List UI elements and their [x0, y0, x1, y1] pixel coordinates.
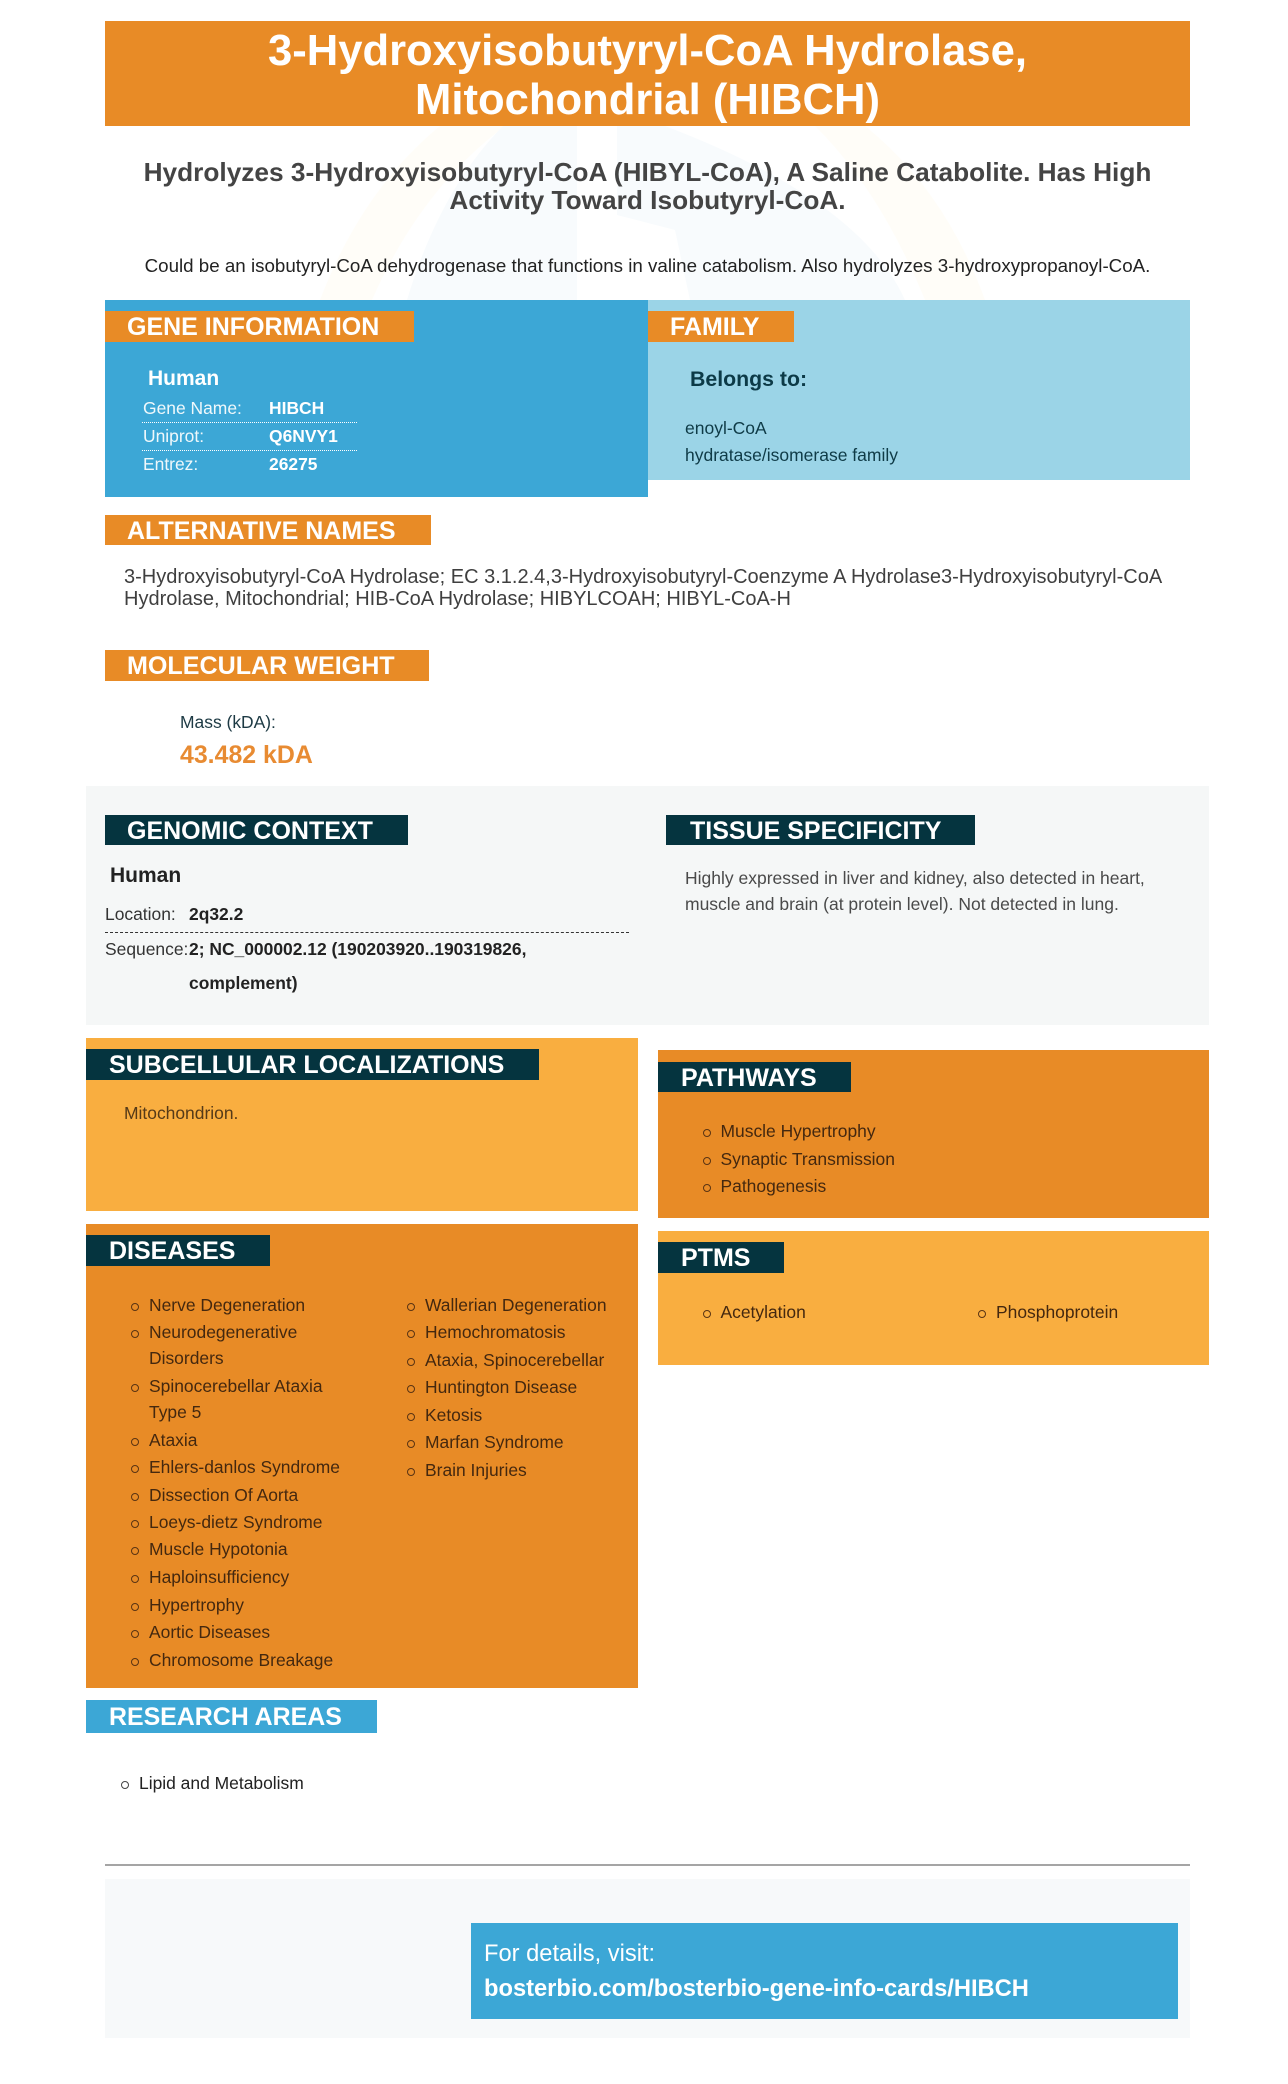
disease list column 1: Disorders [149, 1348, 224, 1368]
heading: family [648, 311, 794, 342]
uniprot row: Uniprot: [143, 426, 204, 446]
mass value: 43.482 kDA [180, 741, 313, 769]
disease list column 1: Chromosome Breakage [149, 1650, 333, 1670]
panel: research areas [86, 1700, 377, 1793]
alternative names text: 3-Hydroxyisobutyryl-CoA Hydrolase; EC 3.1.2.4,3-Hydroxyisobutyryl-Coenzyme A Hydrolase3-Hydroxyisobutyryl-CoA Hydrolase, Mitochondrial; HIB-CoA Hydrolase; HIBYLCOAH; HIBYL-CoA-H [124, 566, 1161, 610]
disease list column 2: Huntington Disease [425, 1377, 577, 1397]
title banner: 3-Hydroxyisobutyryl-CoA Hydrolase, [268, 27, 1027, 75]
disease list column 1: Loeys-dietz Syndrome [149, 1512, 322, 1532]
entrez row: 26275 [269, 454, 318, 474]
footer panel [105, 1879, 1190, 2038]
sequence row [105, 939, 526, 993]
title banner: Mitochondrial (HIBCH) [415, 76, 880, 124]
heading: genomic context: GENOMIC CONTEXT [127, 817, 373, 845]
disease list column 1: Spinocerebellar Ataxia [149, 1376, 323, 1396]
disease list column 1: Dissection Of Aorta [149, 1485, 298, 1505]
ptm list: Phosphoprotein [996, 1302, 1118, 1322]
call to action label: For details, visit: [484, 1941, 655, 1967]
heading: ptms: PTMS [681, 1244, 750, 1272]
pathway list: Pathogenesis [720, 1176, 826, 1196]
pathway list: Synaptic Transmission [720, 1149, 895, 1169]
subtitle [144, 157, 1151, 215]
disease list column 2: Ataxia, Spinocerebellar [425, 1350, 604, 1370]
family name: hydratase/isomerase family [685, 445, 898, 465]
ptm list: Acetylation [720, 1302, 806, 1322]
disease list column 1: Ataxia [149, 1430, 197, 1450]
disease list column 1: Haploinsufficiency [149, 1567, 289, 1587]
subtitle: Hydrolyzes 3-Hydroxyisobutyryl-CoA (HIBYL-CoA), A Saline Catabolite. Has High [144, 157, 1151, 187]
location row [105, 902, 629, 933]
sequence row: Sequence: [105, 939, 188, 959]
location row: 2q32.2 [189, 904, 243, 924]
heading: diseases [86, 1235, 270, 1266]
heading: family: FAMILY [670, 313, 759, 341]
call to action box [471, 1923, 1178, 2019]
background watermark [0, 126, 1288, 300]
pathway list [703, 1121, 895, 1196]
mass label: Mass (kDA): [180, 712, 276, 732]
disease list column 2: Brain Injuries [425, 1460, 527, 1480]
disease list column 2: Hemochromatosis [425, 1322, 566, 1342]
gene name row: HIBCH [269, 398, 324, 418]
tissue specificity text [685, 868, 1145, 914]
uniprot row: Q6NVY1 [269, 426, 338, 446]
heading: subcellular localizations: SUBCELLULAR LOCALIZATIONS [109, 1051, 504, 1079]
heading: gene information: GENE INFORMATION [127, 313, 379, 341]
heading: research areas [86, 1700, 377, 1733]
call to action url: bosterbio.com/bosterbio-gene-info-cards/HIBCH [484, 1976, 1029, 2002]
family name [685, 418, 898, 465]
location row: Location: [105, 904, 176, 924]
panel: subcellular localizations [86, 1038, 638, 1211]
disease list column 1: Muscle Hypotonia [149, 1539, 288, 1559]
disease list column 1: Ehlers-danlos Syndrome [149, 1457, 340, 1477]
research list: Lipid and Metabolism [139, 1773, 304, 1793]
tissue specificity text: muscle and brain (at protein level). Not detected in lung. [685, 894, 1119, 914]
gene name row [142, 398, 357, 423]
localization text: Mitochondrion. [124, 1103, 238, 1123]
heading: alternative names: ALTERNATIVE NAMES [127, 517, 396, 545]
subtitle: Activity Toward Isobutyryl-CoA. [449, 185, 846, 215]
disease list column 1: Aortic Diseases [149, 1622, 270, 1642]
disease list column 1: Hypertrophy [149, 1595, 244, 1615]
panel: ptms [658, 1231, 1209, 1365]
disease list column 1 [131, 1295, 340, 1670]
heading: pathways: PATHWAYS [681, 1064, 817, 1092]
description: Could be an isobutyryl-CoA dehydrogenase that functions in valine catabolism. Also hydrolyzes 3-hydroxypropanoyl-CoA. [145, 255, 1150, 276]
panel: pathways [658, 1050, 1209, 1218]
panel: gene information [105, 300, 648, 497]
panel: genomic context and tissue specificity [86, 786, 1209, 1025]
family name: enoyl-CoA [685, 418, 767, 438]
heading: research areas: RESEARCH AREAS [109, 1703, 342, 1731]
heading: pathways [658, 1062, 851, 1092]
disease list column 2: Ketosis [425, 1405, 482, 1425]
panel: molecular weight [105, 650, 429, 769]
uniprot row [142, 426, 357, 451]
species label: Human [148, 367, 219, 390]
gene name row: Gene Name: [143, 398, 242, 418]
sequence row: complement) [189, 973, 298, 993]
heading: ptms [658, 1242, 784, 1273]
disease list column 2 [407, 1295, 607, 1480]
disease list column 1: Type 5 [149, 1402, 201, 1422]
belongs to label: Belongs to: [690, 367, 807, 391]
species label: Human [110, 864, 181, 887]
entrez row [143, 454, 318, 474]
panel: alternative names [105, 515, 1162, 610]
disease list column 2: Marfan Syndrome [425, 1432, 564, 1452]
heading: diseases: DISEASES [109, 1237, 235, 1265]
disease list column 1: Neurodegenerative [149, 1322, 297, 1342]
pathway list: Muscle Hypertrophy [720, 1121, 876, 1141]
disease list column 2: Wallerian Degeneration [425, 1295, 607, 1315]
panel: diseases [86, 1224, 638, 1688]
heading: tissue specificity: TISSUE SPECIFICITY [690, 817, 941, 845]
tissue specificity text: Highly expressed in liver and kidney, also detected in heart, [685, 868, 1145, 888]
disease list column 1: Nerve Degeneration [149, 1295, 305, 1315]
panel: family [648, 300, 1190, 480]
sequence row: 2; NC_000002.12 (190203920..190319826, [189, 939, 526, 959]
title banner [105, 21, 1190, 126]
ptm list [703, 1302, 1118, 1322]
entrez row: Entrez: [143, 454, 198, 474]
heading: molecular weight: MOLECULAR WEIGHT [127, 652, 395, 680]
